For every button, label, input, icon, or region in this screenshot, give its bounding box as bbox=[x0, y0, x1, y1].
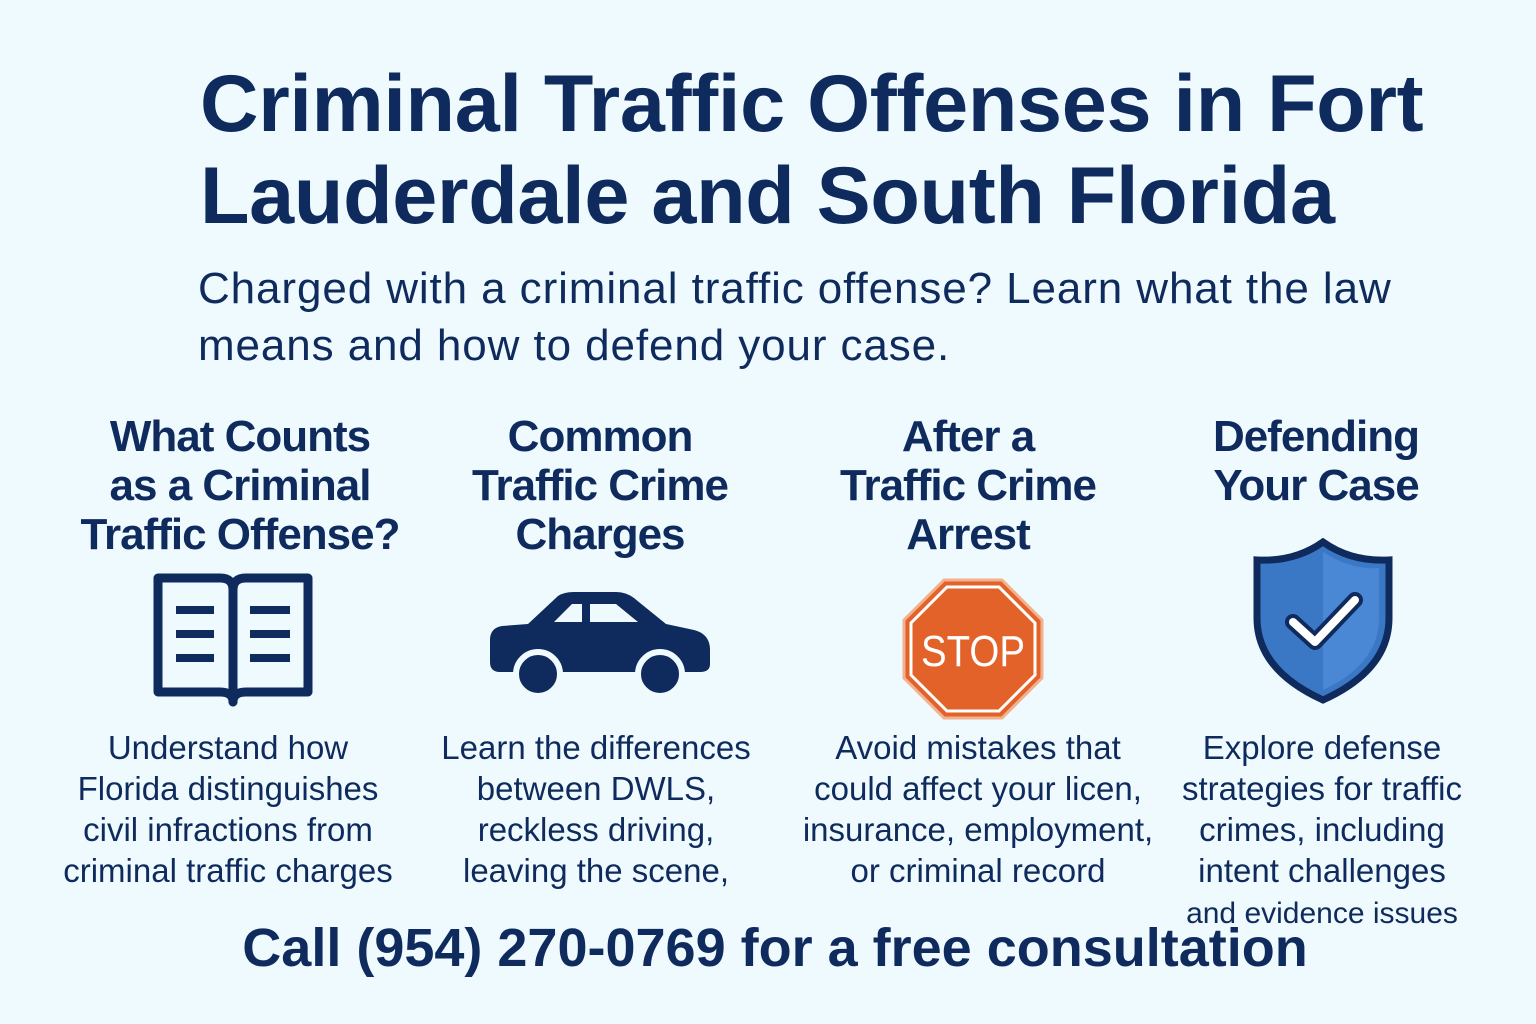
icon: car bbox=[490, 592, 710, 693]
text: column 3: or criminal record bbox=[851, 852, 1105, 889]
text: column 1 bbox=[63, 729, 393, 889]
text: column 1: Understand how bbox=[108, 729, 348, 766]
text: column 3: could affect your licen, bbox=[814, 770, 1142, 807]
text: column 1: civil infractions from bbox=[83, 811, 373, 848]
text: column 4: strategies for traffic bbox=[1182, 770, 1462, 807]
heading: column 1 bbox=[81, 412, 399, 559]
text: column 2 bbox=[441, 729, 751, 889]
text: column 2: leaving the scene, bbox=[463, 852, 729, 889]
text: column 4: intent challenges bbox=[1198, 852, 1446, 889]
text: column 4: Explore defense bbox=[1203, 729, 1441, 766]
heading: column 4: Defending bbox=[1213, 412, 1419, 461]
text: column 3: insurance, employment, bbox=[803, 811, 1153, 848]
heading: column 2: Common bbox=[508, 412, 692, 461]
icon: shield bbox=[1254, 538, 1392, 704]
call to action: Call (954) 270-0769 for a free consultation bbox=[242, 918, 1308, 978]
heading: column 3: After a bbox=[902, 412, 1034, 461]
subtitle: means and how to defend your case. bbox=[198, 321, 950, 370]
text: column 1: criminal traffic charges bbox=[63, 852, 393, 889]
text: column 4: and evidence issues bbox=[1186, 897, 1458, 930]
heading: column 4 bbox=[1213, 412, 1419, 510]
heading: column 2: Charges bbox=[515, 510, 685, 559]
title bbox=[200, 59, 1423, 241]
heading: column 1: What Counts bbox=[110, 412, 370, 461]
heading: column 1: Traffic Offense? bbox=[81, 510, 399, 559]
text: column 2: reckless driving, bbox=[478, 811, 714, 848]
heading: column 1: as a Criminal bbox=[110, 461, 370, 510]
heading: column 3: Arrest bbox=[906, 510, 1030, 559]
icon: stop sign: STOP bbox=[921, 627, 1025, 676]
icon: book bbox=[154, 574, 312, 706]
heading: column 4: Your Case bbox=[1213, 461, 1419, 510]
text: column 4 bbox=[1182, 729, 1462, 930]
icon: stop sign bbox=[902, 578, 1044, 720]
text: column 4: crimes, including bbox=[1199, 811, 1445, 848]
title: Criminal Traffic Offenses in Fort bbox=[200, 59, 1423, 149]
text: column 3: Avoid mistakes that bbox=[835, 729, 1121, 766]
title: Lauderdale and South Florida bbox=[200, 151, 1335, 241]
text: column 3 bbox=[803, 729, 1153, 889]
text: column 1: Florida distinguishes bbox=[78, 770, 378, 807]
heading: column 3 bbox=[840, 412, 1096, 559]
text: column 2: Learn the differences bbox=[441, 729, 751, 766]
subtitle: Charged with a criminal traffic offense? Learn what the law bbox=[198, 264, 1392, 313]
heading: column 2: Traffic Crime bbox=[472, 461, 728, 510]
text: column 2: between DWLS, bbox=[477, 770, 715, 807]
heading: column 2 bbox=[472, 412, 728, 559]
subtitle bbox=[198, 264, 1392, 370]
heading: column 3: Traffic Crime bbox=[840, 461, 1096, 510]
